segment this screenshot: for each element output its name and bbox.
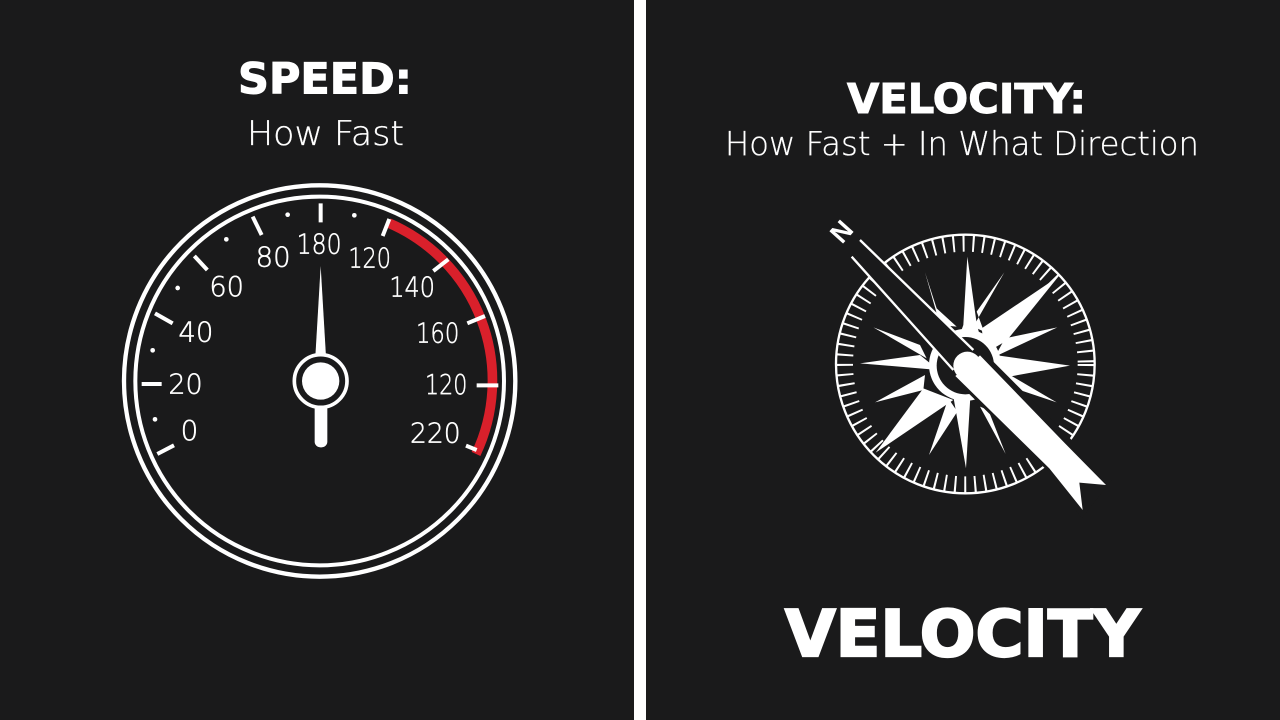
red zone arc [389,223,492,454]
major tick marks [142,203,498,454]
speed labels: 0 [181,416,198,447]
compass [824,214,1112,518]
panel: velocity [725,75,1199,672]
speed labels: 60 [209,272,244,303]
heading: velocity: VELOCITY: [847,75,1086,123]
compass needle [852,240,1112,518]
speed labels: 20 [168,369,203,400]
speed labels: 160 [416,318,459,349]
panel: speed [124,56,515,577]
compass star [860,257,1070,468]
minor tick dots [150,212,357,422]
speed labels: 120 [348,244,391,275]
speed labels: 40 [178,318,213,349]
speed labels: 120 [425,370,467,401]
heading: speed: SPEED: [238,56,412,104]
speed labels: 220 [410,418,461,449]
speed labels: 140 [389,273,435,304]
subheading: how fast: How Fast [247,114,404,154]
compass hub disc [937,337,994,394]
speed labels: 80 [256,243,291,274]
north marker: N [824,214,859,249]
needle [294,266,347,447]
speed labels: 180 [297,229,342,260]
subheading: how fast and direction: How Fast + In What Direction [725,124,1199,163]
speedometer gauge [124,185,515,577]
speed labels [168,229,467,449]
large velocity word: VELOCITY [785,597,1141,672]
compass dial [836,235,1095,493]
